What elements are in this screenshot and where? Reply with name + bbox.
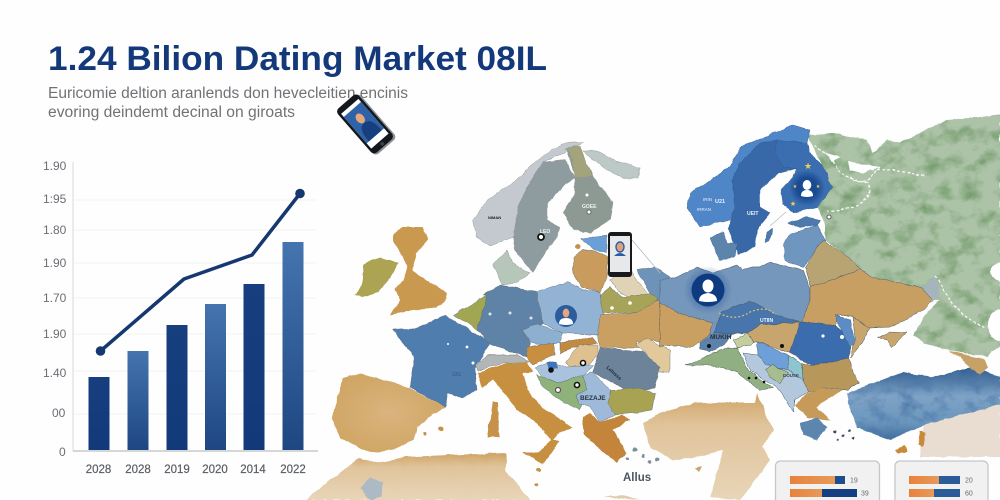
icon: stars: ★ — [793, 184, 798, 190]
card bars — [790, 476, 857, 497]
y axis labels: 1.70 — [43, 291, 67, 305]
y axis labels: 1.40 — [43, 366, 67, 380]
x axis labels — [86, 464, 306, 476]
panel: right mini bar card — [895, 461, 988, 500]
map pins — [447, 194, 844, 392]
card bars — [909, 476, 960, 497]
left map: western and central europe — [392, 235, 670, 422]
map labels: LEO — [540, 229, 550, 235]
map labels: Lelnsss — [605, 365, 623, 382]
map labels: UTIIN — [760, 318, 773, 324]
y axis labels: 1.90 — [43, 256, 67, 270]
subtitle — [48, 85, 408, 121]
card values: 19 — [850, 478, 858, 484]
icon: stars: ★ — [790, 200, 796, 208]
trend line — [96, 189, 305, 356]
left map: british isles — [355, 227, 447, 315]
right map: scandinavia — [687, 125, 833, 267]
y axis labels: 0 — [59, 445, 66, 459]
map labels: MUKIH — [710, 334, 732, 341]
x axis labels: 2020 — [202, 464, 228, 476]
europe map — [305, 115, 1000, 500]
map labels: NIMAN — [488, 215, 501, 220]
subtitle: evoring deindemt decinal on giroats — [48, 104, 295, 121]
card values: 20 — [965, 478, 973, 484]
map labels: UEIT — [747, 211, 758, 217]
x axis labels: 2014 — [240, 464, 266, 476]
map labels: IRRAN — [697, 207, 711, 212]
x axis labels: 2028 — [86, 464, 111, 476]
x axis labels: 2028 — [125, 464, 151, 476]
x axis labels: 2022 — [280, 464, 306, 476]
icon: tilted smartphone — [335, 92, 397, 157]
right map: greece, turkey and caucasus — [695, 350, 1000, 472]
right map: central and eastern europe — [660, 240, 932, 412]
icon: large profile marker — [684, 266, 732, 314]
map labels: GOEE — [582, 204, 597, 210]
y axis labels: 00 — [52, 406, 66, 420]
card values — [965, 478, 973, 498]
map labels: BEZAJE — [580, 395, 606, 402]
right map: russia — [807, 115, 1000, 357]
map labels: Allus — [623, 472, 651, 484]
icon: finland profile marker — [789, 170, 825, 206]
icon: stars: ★ — [816, 184, 821, 190]
right map: russia water and routes — [810, 143, 1000, 341]
icon: stars: ★ — [804, 161, 812, 171]
card values: 60 — [965, 490, 973, 498]
y axis labels — [43, 159, 67, 459]
left map: southern europe and north africa — [305, 244, 773, 500]
panel: left mini bar card — [776, 461, 880, 500]
icon: central profile marker — [555, 305, 577, 327]
icon: stars — [790, 161, 821, 208]
card values — [850, 478, 869, 498]
subtitle: Euricomie deltion aranlends don hevecleitien encinis — [48, 85, 408, 102]
map labels: DOUSE — [783, 373, 799, 378]
title: 1.24 Bilion Dating Market 08IL — [48, 40, 547, 78]
card values: 39 — [861, 490, 869, 498]
bar and line chart — [43, 159, 318, 476]
grid lines and axes — [73, 162, 318, 451]
dotted border marker line — [719, 309, 775, 317]
map labels — [452, 197, 799, 484]
map labels: GIG — [452, 372, 461, 378]
y axis labels: 1:95 — [43, 192, 67, 206]
map labels: IRIN — [703, 197, 712, 202]
map labels: U21 — [715, 199, 725, 205]
x axis labels: 2019 — [164, 464, 190, 476]
icon: phone on map — [608, 232, 632, 277]
y axis labels: 1.90 — [43, 327, 67, 341]
left map: scandinavia — [473, 142, 640, 285]
y axis labels: 1.90 — [43, 159, 67, 173]
connector lines — [632, 212, 786, 273]
y axis labels: 1.80 — [43, 223, 67, 237]
bars — [88, 242, 304, 450]
